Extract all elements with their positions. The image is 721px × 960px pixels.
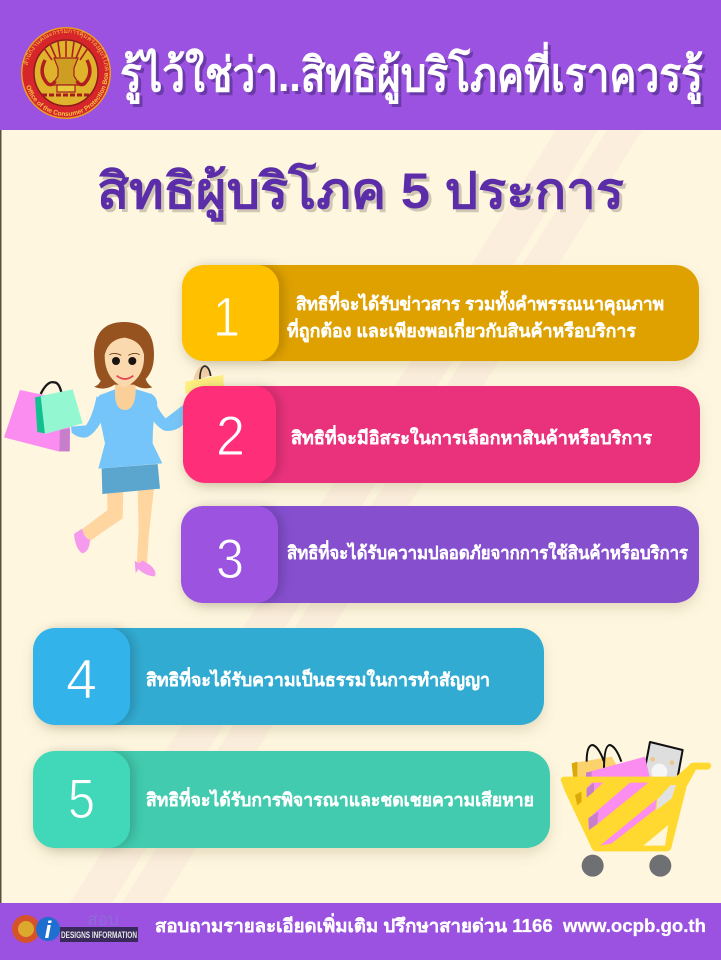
card 5 text: สิทธิที่จะได้รับการพิจารณาและชดเชยความเสียหาย	[146, 787, 534, 810]
icon: yellow bag	[572, 745, 623, 790]
footer logo wordmark: DESIGNS INFORMATION	[61, 930, 137, 941]
footer logo wordmark: สอบ	[87, 910, 119, 929]
card 3	[181, 506, 699, 603]
card 4 text: สิทธิที่จะได้รับความเป็นธรรมในการทำสัญญา	[146, 667, 490, 691]
card 2 number: 2	[216, 404, 245, 467]
icon: skirt	[102, 464, 160, 494]
card 3 text: สิทธิที่จะได้รับความปลอดภัยจากการใช้สินค้าหรือบริการ	[287, 540, 688, 563]
card 5 number: 5	[68, 767, 95, 830]
card 4	[33, 628, 544, 725]
icon: pink bag	[4, 390, 70, 451]
icon: mint bag	[35, 382, 83, 434]
icon: phone	[639, 742, 683, 808]
card 5	[33, 751, 550, 848]
icon: hair	[94, 322, 154, 389]
icon: information badge	[36, 917, 60, 944]
pink stripes seen through the basket	[587, 783, 603, 798]
icon: cart wheels	[582, 855, 671, 877]
footer contact text: สอบถามรายละเอียดเพิ่มเติม ปรึกษาสายด่วน 1166 www.ocpb.go.th	[155, 913, 706, 936]
card 5 number tile	[33, 751, 130, 848]
card 2	[183, 386, 700, 483]
footer band	[0, 903, 721, 960]
icon: consumer protection board seal	[21, 27, 111, 119]
card 2 number tile	[183, 386, 276, 483]
icon: top	[97, 389, 162, 469]
icon: consumer protection board seal: สำนักงานคณะกรรมการคุ้มครองผู้บริโภค	[23, 29, 109, 71]
icon: cart basket	[561, 763, 711, 851]
icon: right-hand yellow bag	[185, 365, 224, 393]
card 1 number: 1	[213, 285, 240, 348]
illustration: shopping cart	[561, 742, 711, 877]
main heading: สิทธิผู้บริโภค 5 ประการ	[97, 161, 624, 222]
card 4 number tile	[33, 628, 130, 725]
icon: legs and shoes	[74, 488, 155, 576]
illustration: woman with shopping bags	[4, 322, 224, 576]
header band	[0, 0, 721, 130]
icon: information badge: i	[45, 917, 53, 944]
card 1 text: สิทธิที่จะได้รับข่าวสาร รวมทั้งคำพรรณนาคุณภาพ	[296, 290, 664, 316]
card 3 number: 3	[216, 527, 244, 590]
icon: face	[105, 338, 144, 388]
card 1 text	[287, 290, 664, 343]
card 1 number tile	[182, 265, 279, 361]
main heading: สิทธิผู้บริโภค 5 ประการ	[100, 164, 627, 225]
card 4 number: 4	[66, 647, 97, 710]
icon: eyes and smile	[109, 353, 140, 379]
card 2 text: สิทธิที่จะมีอิสระในการเลือกหาสินค้าหรือบริการ	[291, 425, 652, 448]
footer logo wordmark	[60, 910, 138, 942]
card 1 text: ที่ถูกต้อง และเพียงพอเกี่ยวกับสินค้าหรือบริการ	[287, 318, 636, 343]
card 3 number tile	[181, 506, 278, 603]
card 1	[182, 265, 699, 361]
icon: arms	[71, 393, 184, 438]
icon: footer seal	[12, 915, 40, 943]
icon: pink bag	[586, 757, 650, 778]
icon: neck	[115, 378, 136, 410]
